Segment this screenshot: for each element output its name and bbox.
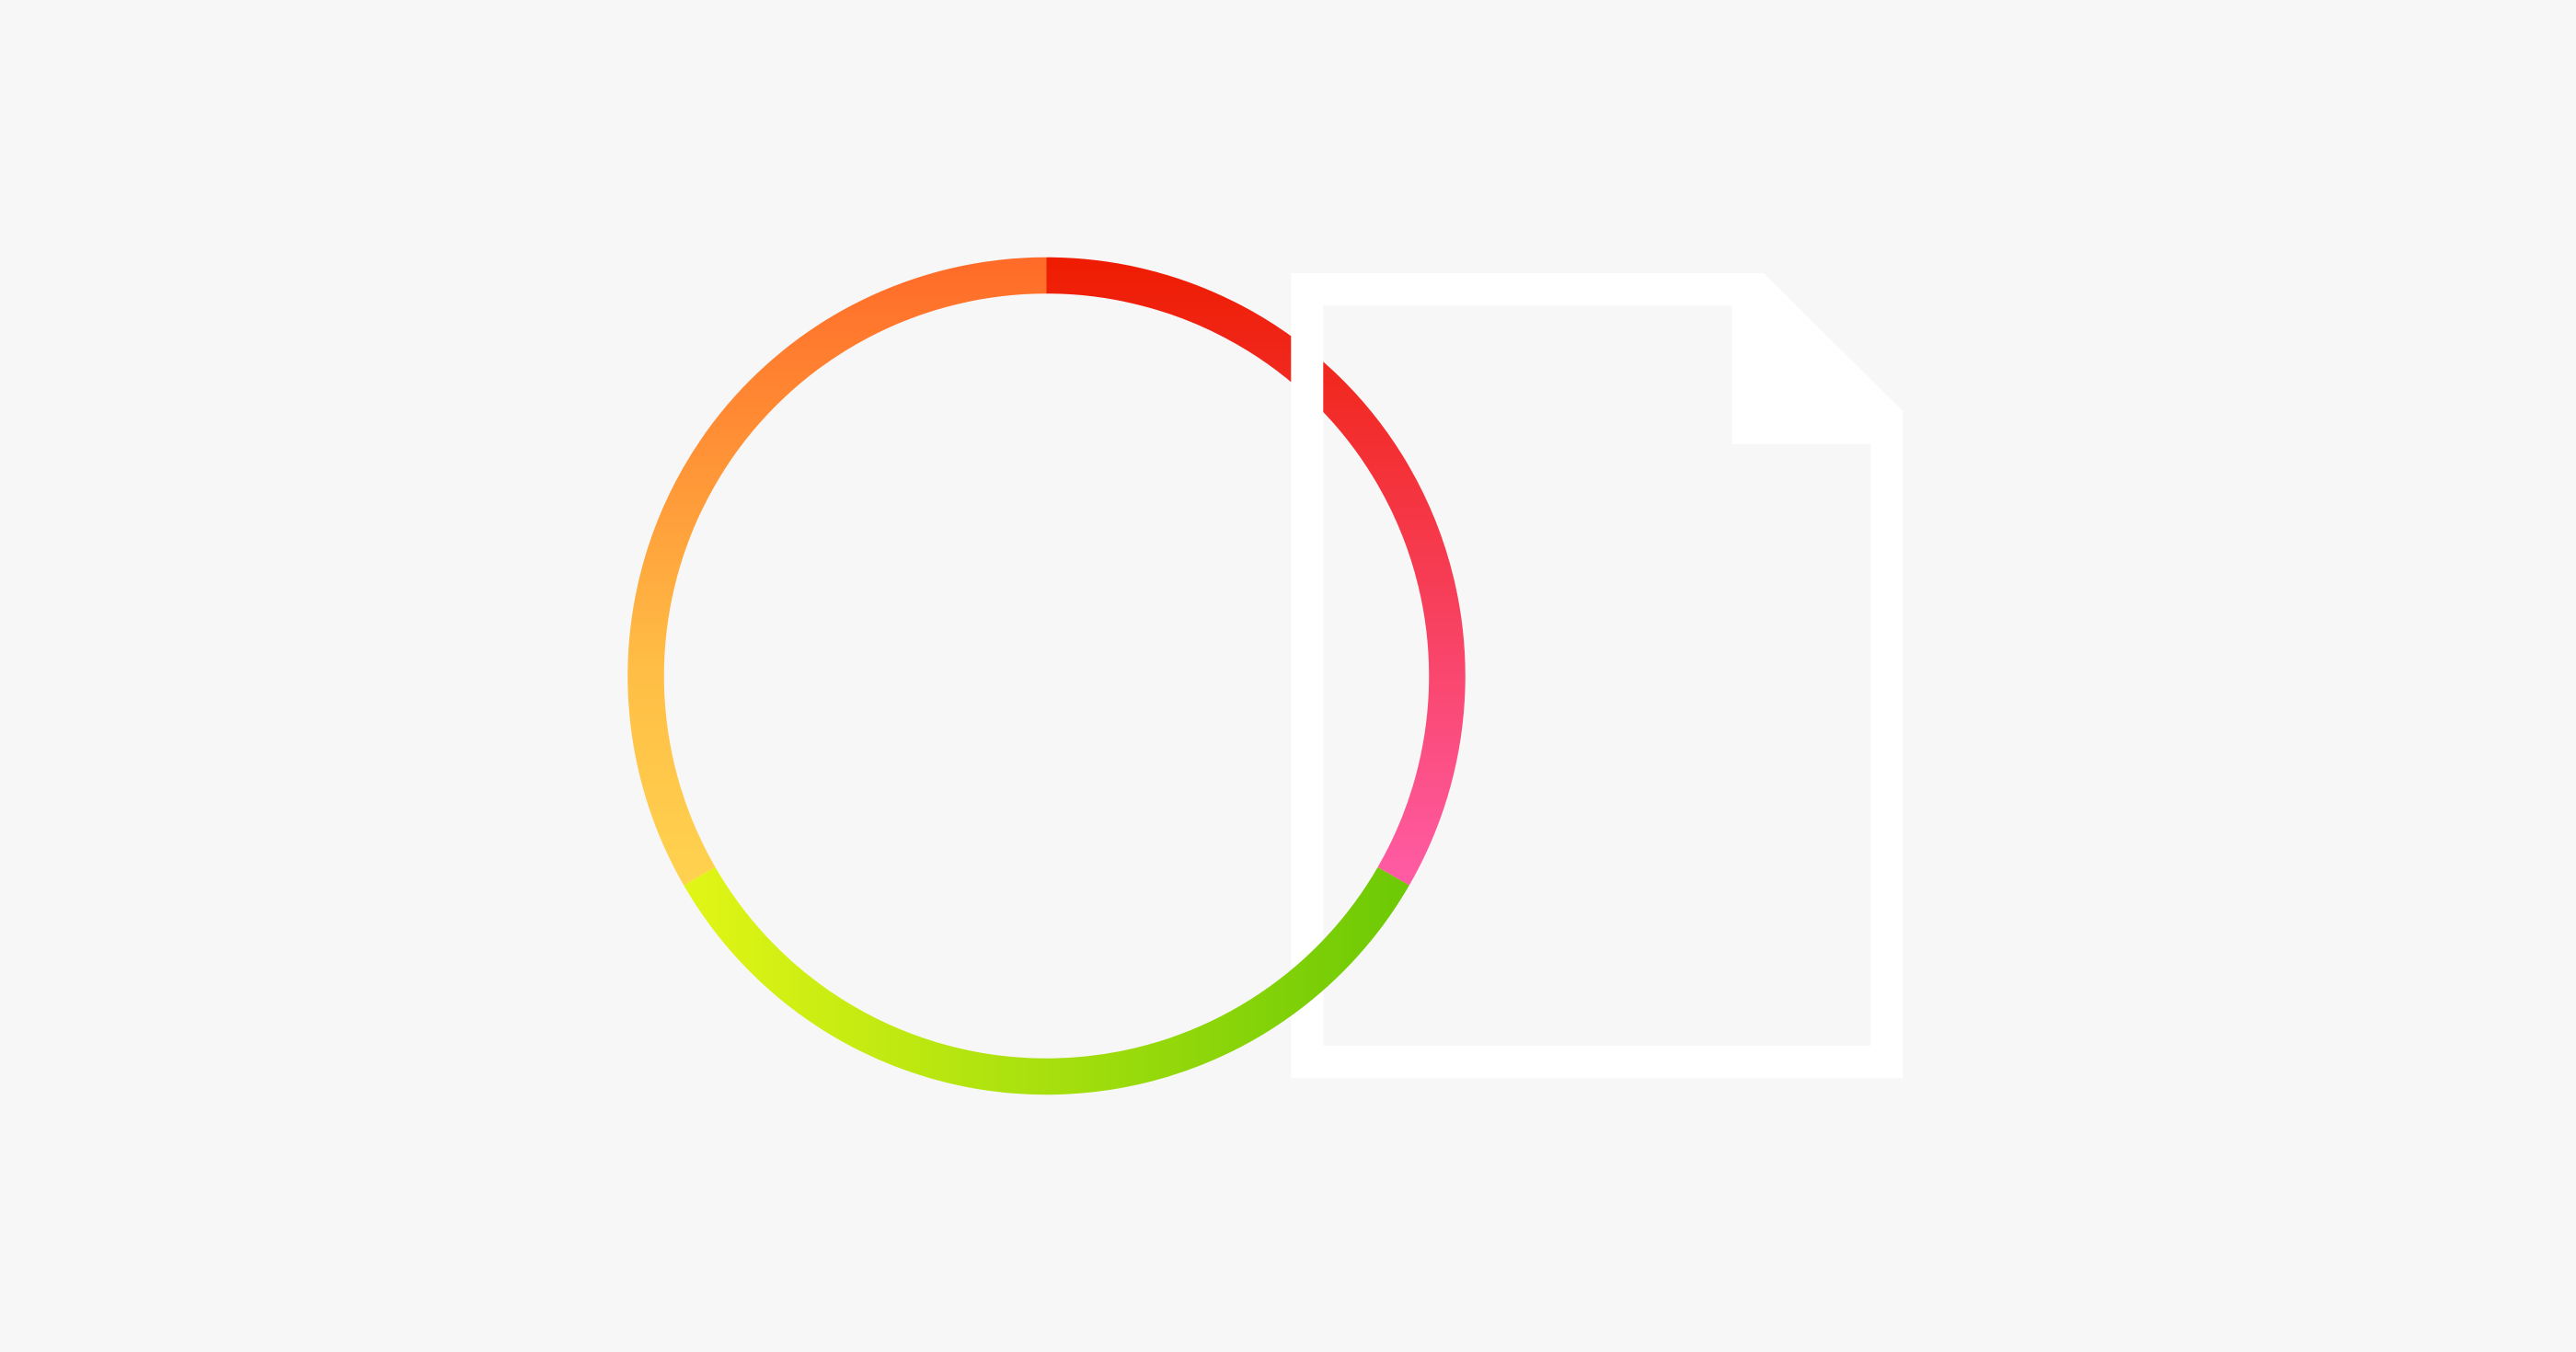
icon: document outline with folded corner [1291, 273, 1903, 1078]
ring segment: red to pink [1047, 276, 1447, 877]
ring segment: green to lime [699, 877, 1394, 1076]
ring segment: yellow to orange [646, 276, 1047, 877]
